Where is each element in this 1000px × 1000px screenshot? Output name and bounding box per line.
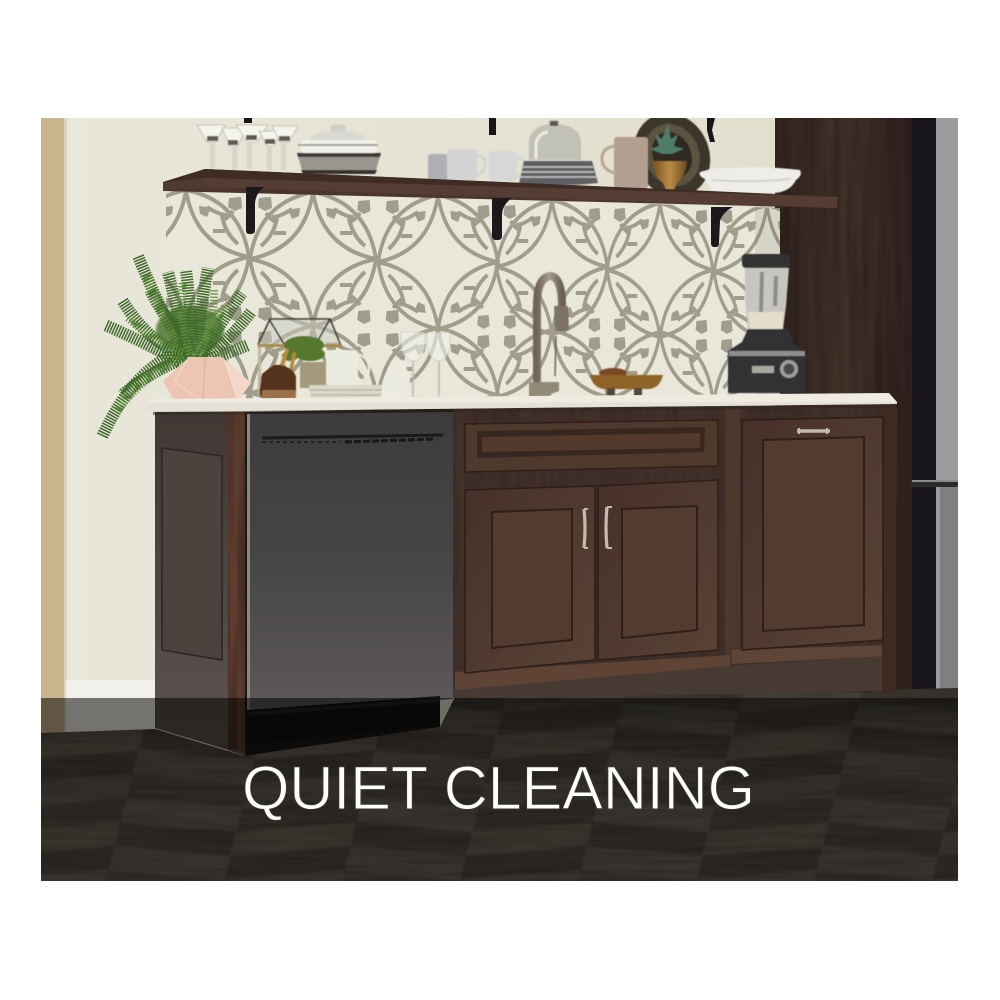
drawer front (465, 420, 718, 472)
dark translucent caption band (41, 698, 958, 881)
black stainless dishwasher (247, 412, 453, 710)
blender (728, 254, 805, 393)
wooden shelf (163, 169, 838, 208)
white mug and saucers (309, 350, 384, 399)
countertop (147, 393, 897, 415)
pull-down faucet (529, 276, 569, 397)
mugs (428, 149, 525, 181)
glass terrarium with brass frame (258, 319, 342, 394)
wall shadow behind tall cabinet (755, 205, 780, 395)
tall dark cabinet and fridge (775, 118, 958, 693)
shelf brackets (246, 187, 733, 247)
base cabinet doors (465, 417, 883, 673)
shadow backing below appliances (245, 408, 456, 756)
wooden tray (590, 368, 663, 397)
patterned tile backsplash (166, 191, 780, 398)
taupe mug (602, 137, 648, 189)
infographic photo panel with caption (41, 118, 958, 881)
glass cloche and stacked plates (519, 120, 598, 185)
left end panel (155, 412, 245, 756)
wall (41, 118, 781, 740)
covered dish in wire basket (297, 124, 381, 174)
shelf glassware (197, 125, 298, 170)
fern in pink vase (102, 256, 251, 437)
floor (41, 688, 958, 881)
small brown jar (260, 365, 296, 399)
upper brackets (244, 118, 715, 142)
dark decorative platter (635, 118, 711, 190)
title: QUIET CLEANING (242, 754, 755, 822)
white scalloped baking dish (700, 167, 801, 193)
kitchen photo (30, 100, 970, 890)
lower cabinets (453, 405, 897, 698)
small plant in brass pot (650, 123, 687, 190)
cabinet handles (584, 428, 830, 548)
creamer and wine glasses (381, 332, 450, 399)
